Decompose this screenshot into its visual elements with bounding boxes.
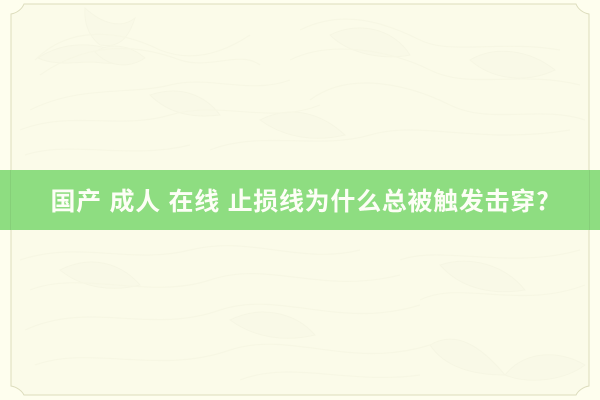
green title band [0,170,600,230]
title: 国产 成人 在线 止损线为什么总被触发击穿? [50,182,550,218]
